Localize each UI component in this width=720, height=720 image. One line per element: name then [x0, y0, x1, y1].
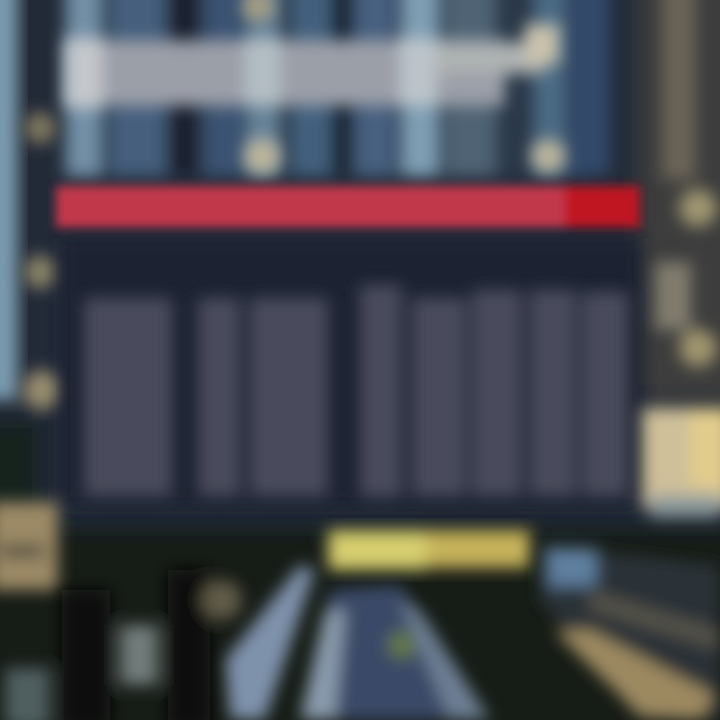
yellow banner [328, 530, 530, 570]
left beige block [0, 502, 58, 590]
right side beige column [655, 0, 717, 367]
left pale blue stripe [0, 0, 18, 400]
dark table panel [62, 238, 640, 506]
red banner [56, 186, 640, 228]
table columns [84, 285, 628, 497]
bottom left foliage and lights [5, 570, 242, 720]
bottom road [225, 565, 490, 720]
right glowing block [642, 408, 720, 517]
bottom right road and lights [540, 545, 720, 720]
small beige markers [22, 0, 565, 410]
title band [64, 24, 559, 108]
top vertical stripes [60, 0, 610, 180]
